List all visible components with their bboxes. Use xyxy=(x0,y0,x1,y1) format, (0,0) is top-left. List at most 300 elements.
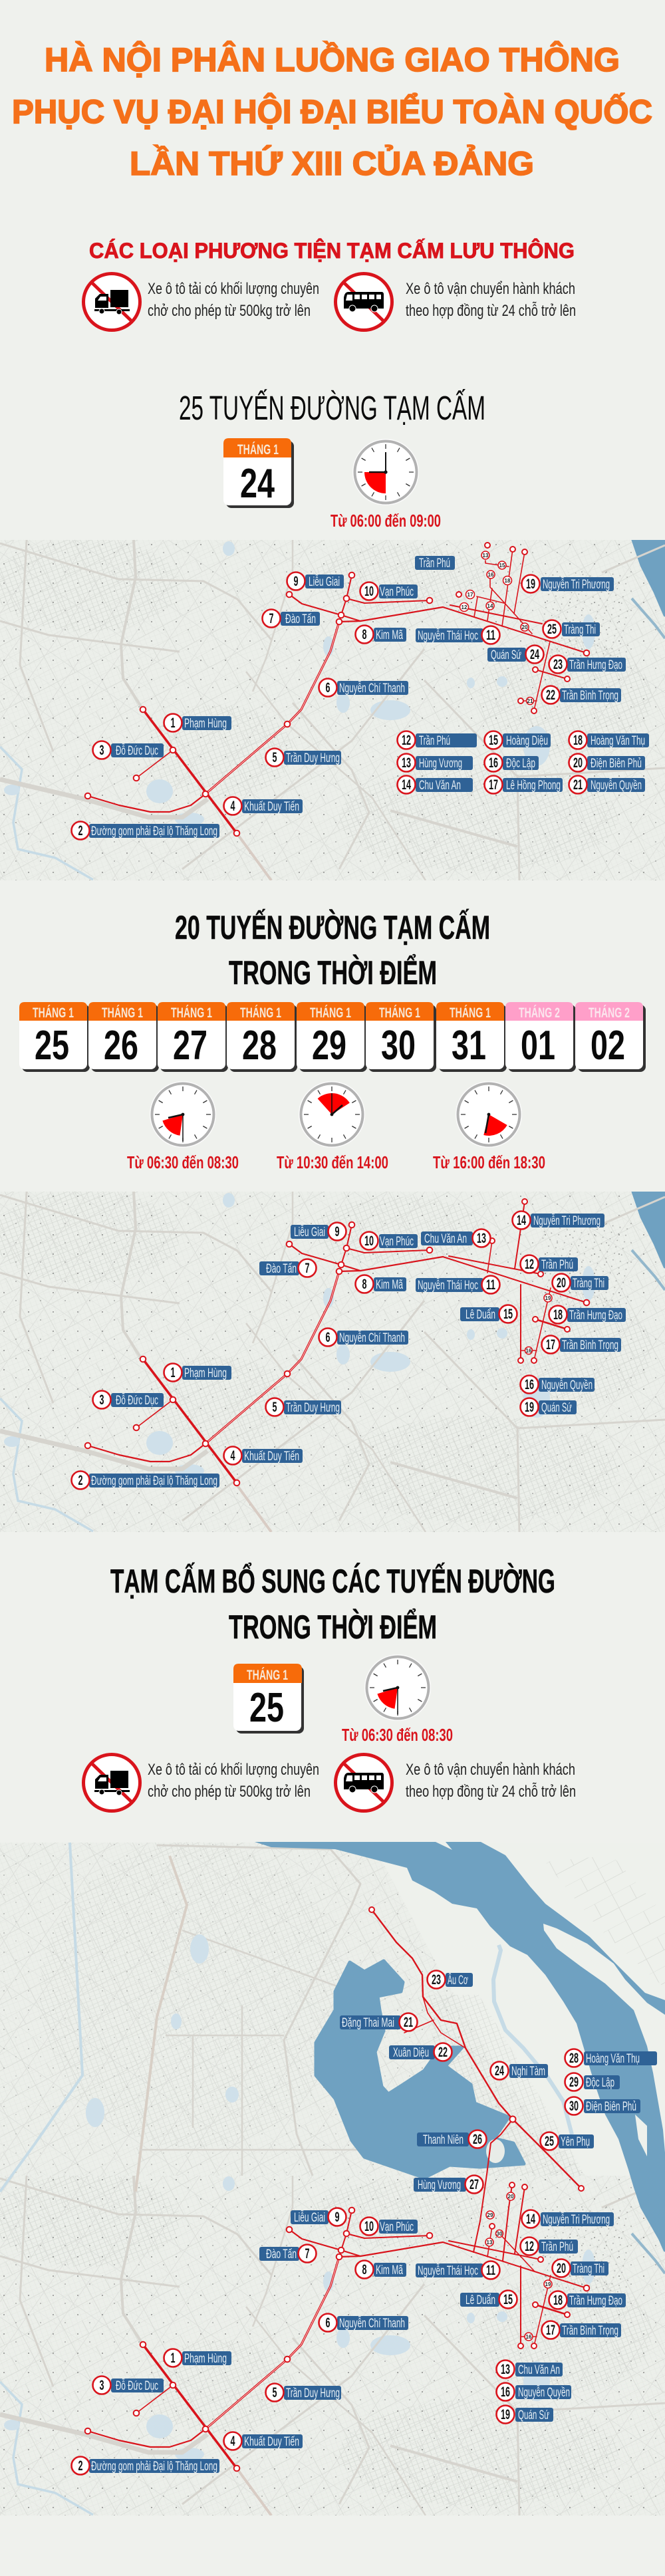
label 3 xyxy=(93,741,164,759)
label 5: 5 xyxy=(273,1400,277,1415)
legend 13: 13 xyxy=(402,755,411,771)
label 14 xyxy=(512,1212,604,1229)
label 6: 6 xyxy=(326,680,330,696)
label 19: 19 xyxy=(501,2407,510,2422)
label 4 xyxy=(223,797,303,815)
label 25: Tràng Thi xyxy=(564,623,596,637)
title: PHỤC VỤ ĐẠI HỘI ĐẠI BIỂU TOÀN QUỐC xyxy=(12,92,652,130)
label 20: 20 xyxy=(557,1275,566,1291)
label 8: 8 xyxy=(362,627,367,642)
calendar: 24 January: THÁNG 1 xyxy=(237,442,279,457)
routes: 19 xyxy=(545,2281,551,2287)
label 9 xyxy=(291,1222,346,1241)
label 3 xyxy=(93,1391,164,1408)
calendar 31: 31 xyxy=(452,1023,486,1069)
calendar 02: THÁNG 2 xyxy=(589,1005,630,1021)
text: truck rule: Xe ô tô tải có khối lượng chuyên xyxy=(148,280,319,298)
label 1: Phạm Hùng xyxy=(184,2352,227,2366)
legend 20: 20 xyxy=(573,755,583,771)
label 27: 27 xyxy=(469,2177,479,2192)
label 21: 21 xyxy=(404,2015,413,2030)
label 25 xyxy=(540,2132,594,2150)
legend 16: 16 xyxy=(489,755,498,771)
label 2: 2 xyxy=(78,1473,82,1488)
map 1: 25 routes xyxy=(0,539,665,880)
legend 14: 14 xyxy=(402,777,411,793)
label 7: Đào Tấn xyxy=(285,612,316,626)
calendar row: 25 January to 2 February xyxy=(19,1002,646,1072)
label 16: Nguyễn Quyền xyxy=(541,1378,593,1392)
text: bus rule: theo hợp đồng từ 24 chỗ trở lên xyxy=(406,302,576,320)
label 11: Nguyễn Thái Học xyxy=(418,628,478,643)
time label: Từ 06:30 đến 08:30 xyxy=(342,1725,453,1745)
label 11: Nguyễn Thái Học xyxy=(418,1278,478,1293)
label 4 xyxy=(223,2432,303,2450)
label 12 xyxy=(520,2237,578,2255)
legend 18 xyxy=(569,731,649,749)
label 14: Nguyễn Tri Phương xyxy=(543,2212,610,2227)
label 1: Phạm Hùng xyxy=(184,1366,227,1380)
label 26: 26 xyxy=(473,2132,482,2147)
clock: 10:30 to 14:00 xyxy=(299,1081,365,1148)
text: bus rule xyxy=(406,1761,576,1801)
label 7 xyxy=(262,609,320,628)
label 1: 1 xyxy=(170,715,176,731)
label 22: Xuân Diệu xyxy=(393,2046,429,2060)
label 8 xyxy=(355,1275,406,1293)
label 12: 12 xyxy=(525,1257,534,1272)
calendar 29 xyxy=(297,1002,367,1072)
label 5 xyxy=(266,2383,341,2402)
calendar 31 xyxy=(436,1002,507,1072)
label 10: Vạn Phúc xyxy=(380,2220,414,2234)
label 23: 23 xyxy=(432,1972,441,1988)
label 10 xyxy=(360,2217,418,2236)
label 6: 6 xyxy=(326,1330,330,1345)
label 30: 30 xyxy=(569,2099,579,2114)
label 26 xyxy=(417,2130,487,2148)
label 19: Nguyễn Tri Phương xyxy=(543,577,610,592)
label 18: 18 xyxy=(553,1307,563,1323)
legend 17 xyxy=(484,775,563,794)
label 10 xyxy=(360,582,418,600)
clock: 06:30 to 08:30 xyxy=(150,1081,216,1148)
routes: 12 xyxy=(462,604,467,610)
label 30: Điện Biên Phủ xyxy=(586,2100,636,2114)
label 11: 11 xyxy=(486,2263,495,2278)
calendar 01 xyxy=(505,1002,576,1072)
time label: 16:00: Từ 16:00 đến 18:30 xyxy=(433,1152,545,1172)
label 13: Chu Văn An xyxy=(518,2363,560,2377)
text: bus rule xyxy=(406,280,576,320)
text: bus rule: theo hợp đồng từ 24 chỗ trở lên xyxy=(406,1783,576,1801)
routes: 20 xyxy=(522,624,528,630)
heading: 25 routes: 25 TUYẾN ĐƯỜNG TẠM CẤM xyxy=(179,388,485,427)
calendar 29: 29 xyxy=(312,1023,346,1069)
routes xyxy=(85,1199,589,1485)
heading: 20 routes xyxy=(175,909,490,991)
label 10: Vạn Phúc xyxy=(380,585,414,599)
label 17 xyxy=(541,2321,621,2339)
text: bus rule: Xe ô tô vận chuyển hành khách xyxy=(406,1761,575,1779)
label 18 xyxy=(549,1306,626,1323)
label 22 xyxy=(541,686,621,704)
label 17: Trần Bình Trọng xyxy=(562,1339,618,1352)
label 3 xyxy=(93,2377,164,2394)
map background xyxy=(0,539,665,880)
label 23: Âu Cơ xyxy=(448,1973,468,1988)
text: truck rule xyxy=(148,280,319,320)
icon: no buses xyxy=(335,274,392,330)
label 26: Thanh Niên xyxy=(423,2133,464,2147)
legend 14: Chu Văn An xyxy=(419,779,461,793)
text: truck rule: chở cho phép từ 500kg trở lên xyxy=(148,1783,311,1801)
label 19: Quán Sứ xyxy=(541,1401,572,1415)
label 9: Liễu Giai xyxy=(309,575,340,589)
label 7 xyxy=(259,1259,317,1277)
label 4: Khuất Duy Tiến xyxy=(244,800,299,814)
label 3: 3 xyxy=(100,1392,104,1408)
calendar 28: THÁNG 1 xyxy=(240,1005,281,1021)
label 3: Đỗ Đức Dục xyxy=(116,743,158,758)
calendar 30: 30 xyxy=(381,1023,416,1069)
title: LẦN THỨ XIII CỦA ĐẢNG xyxy=(130,144,534,182)
label 12: Trần Phú xyxy=(541,1258,573,1272)
label 13 xyxy=(496,2361,563,2378)
label 23: Trần Hưng Đạo xyxy=(569,658,622,672)
calendar 25: THÁNG 1 xyxy=(33,1005,74,1021)
clock: 06:30 to 08:30 xyxy=(364,1654,431,1721)
label 6: Nguyễn Chí Thanh xyxy=(339,681,405,696)
label 9: 9 xyxy=(294,574,298,589)
label 19: 19 xyxy=(525,1400,534,1415)
label 5 xyxy=(266,749,341,766)
calendar 26 xyxy=(88,1002,159,1072)
legend 21 xyxy=(569,775,645,794)
label 7 xyxy=(259,2245,317,2262)
label 13: 13 xyxy=(477,1231,486,1246)
label 9: Liễu Giai xyxy=(294,2210,325,2225)
label 5: 5 xyxy=(273,2385,277,2400)
label 6: 6 xyxy=(326,2315,330,2331)
label 12 xyxy=(520,1255,578,1273)
label 29: Độc Lập xyxy=(586,2076,614,2090)
label 7: 7 xyxy=(269,611,274,626)
title: HÀ NỘI PHÂN LUỒNG GIAO THÔNG xyxy=(45,41,620,78)
label 7: 7 xyxy=(305,1261,310,1276)
label 7: Đào Tấn xyxy=(266,2248,297,2261)
label 8 xyxy=(355,625,406,644)
time label: Từ 06:00 đến 09:00 xyxy=(331,511,441,531)
legend 16 xyxy=(484,754,539,771)
legend 13 xyxy=(398,754,473,771)
map 3: additional routes xyxy=(0,1842,665,2515)
label 11: Nguyễn Thái Học xyxy=(418,2263,478,2278)
calendar 01: 01 xyxy=(521,1023,555,1069)
label 3: 3 xyxy=(100,2378,104,2393)
label 2 xyxy=(72,2456,219,2475)
label 10: 10 xyxy=(364,2219,374,2234)
routes xyxy=(85,1907,589,2471)
label 9 xyxy=(287,572,344,590)
label 24 xyxy=(491,2061,548,2080)
heading: additional routes: TRONG THỜI ĐIỂM xyxy=(229,1609,437,1646)
legend 21: 21 xyxy=(573,777,583,793)
label 20 xyxy=(552,2259,608,2277)
time label: 10:30: Từ 10:30 đến 14:00 xyxy=(277,1152,388,1172)
heading: banned vehicle types: CÁC LOẠI PHƯƠNG TIỆN TẠM CẤM LƯU THÔNG xyxy=(89,239,575,263)
label 3: 3 xyxy=(100,743,104,758)
label 24: 24 xyxy=(530,647,539,662)
calendar: 24 January xyxy=(223,438,294,508)
icon: no buses xyxy=(335,1754,392,1811)
label 25: 25 xyxy=(545,2134,554,2149)
legend 15 xyxy=(484,731,551,749)
label 1 xyxy=(164,714,231,731)
heading: 20 routes: 20 TUYẾN ĐƯỜNG TẠM CẤM xyxy=(175,909,490,946)
label 2: Đường gom phải Đại lộ Thăng Long xyxy=(91,825,217,838)
calendar: 25 January: THÁNG 1 xyxy=(247,1668,288,1683)
label 7: Đào Tấn xyxy=(266,1262,297,1276)
label 30 xyxy=(565,2097,640,2115)
routes: 13 xyxy=(487,2240,493,2246)
label 2: 2 xyxy=(78,823,82,838)
map 2: 20 routes xyxy=(0,1190,665,1532)
calendar 26: 26 xyxy=(104,1023,138,1069)
time label: 06:30: Từ 06:30 đến 08:30 xyxy=(127,1152,239,1172)
label 15 xyxy=(460,2290,517,2309)
label 11 xyxy=(416,1275,500,1294)
label 25 xyxy=(543,620,600,638)
label 5 xyxy=(266,1398,341,1416)
label 17: 17 xyxy=(546,1337,555,1352)
legend 18: 18 xyxy=(573,733,583,748)
label 4: 4 xyxy=(230,1448,235,1464)
label 13: 13 xyxy=(501,2362,510,2377)
label 19 xyxy=(521,575,614,593)
label 10 xyxy=(360,1231,418,1250)
calendar 01: THÁNG 2 xyxy=(519,1005,560,1021)
label 16 xyxy=(496,2383,571,2400)
label 6: Nguyễn Chí Thanh xyxy=(339,2316,405,2331)
label 19: Quán Sứ xyxy=(518,2408,549,2422)
calendar 27: 27 xyxy=(173,1023,207,1069)
clock: 06:00 to 09:00 xyxy=(352,439,419,505)
routes: 14 xyxy=(487,603,493,609)
label 29: 29 xyxy=(569,2075,579,2090)
legend 15: Hoàng Diệu xyxy=(506,734,548,748)
label 18: Trần Hưng Đạo xyxy=(569,1309,622,1323)
legend 12: 12 xyxy=(402,733,411,748)
routes: 19 xyxy=(545,1295,551,1301)
label 1: 1 xyxy=(170,1365,176,1380)
heading: 20 routes: TRONG THỜI ĐIỂM xyxy=(229,954,437,991)
label 2 xyxy=(72,822,219,839)
legend 17: Lê Hồng Phong xyxy=(506,779,561,793)
text: bus rule: Xe ô tô vận chuyển hành khách xyxy=(406,280,575,298)
label Trần Phú: Trần Phú xyxy=(419,557,450,571)
label 16: 16 xyxy=(501,2384,510,2400)
label 1: 1 xyxy=(170,2351,176,2366)
routes: 20 xyxy=(508,2194,514,2200)
label 14 xyxy=(521,2210,614,2228)
label 8: 8 xyxy=(362,2262,367,2277)
label 22: 22 xyxy=(438,2045,448,2060)
legend 17: 17 xyxy=(489,777,498,793)
label 16: 16 xyxy=(525,1377,534,1392)
title xyxy=(12,41,652,182)
icon: no trucks xyxy=(84,1754,140,1811)
label 11 xyxy=(416,2261,500,2279)
label 8: Kim Mã xyxy=(376,2263,403,2277)
label 2 xyxy=(72,1471,219,1489)
calendar: 24 January: 24 xyxy=(240,461,275,507)
label 8 xyxy=(355,2261,406,2278)
label 1 xyxy=(164,2349,231,2367)
label 1 xyxy=(164,1363,231,1382)
label 9: 9 xyxy=(335,2210,339,2225)
calendar 30 xyxy=(366,1002,436,1072)
label 4: Khuất Duy Tiến xyxy=(244,1450,299,1464)
routes: 30 xyxy=(497,2231,503,2237)
label 17 xyxy=(541,1335,621,1354)
label 19: 19 xyxy=(526,577,535,592)
routes: 16 xyxy=(488,572,494,578)
label 19 xyxy=(520,1398,577,1416)
calendar 25: 25 xyxy=(35,1023,69,1069)
label 11: 11 xyxy=(486,1277,495,1293)
label 9 xyxy=(291,2208,346,2226)
routes: 15 xyxy=(499,563,505,569)
label 10: 10 xyxy=(364,1233,374,1249)
label 18: 18 xyxy=(553,2293,563,2308)
label 5: Trần Duy Hưng xyxy=(286,751,340,765)
label 21: Đặng Thai Mai xyxy=(342,2016,394,2030)
label 14: 14 xyxy=(517,1213,526,1228)
routes: 21 xyxy=(527,698,533,704)
legend 16: Độc Lập xyxy=(506,757,535,771)
label 14: Nguyễn Tri Phương xyxy=(533,1214,600,1228)
label 10: Vạn Phúc xyxy=(380,1235,414,1249)
routes: 13 xyxy=(483,553,489,559)
label 2: 2 xyxy=(78,2458,82,2474)
label 4: 4 xyxy=(230,2434,235,2449)
label 20 xyxy=(552,1274,608,1291)
calendar 25 xyxy=(19,1002,90,1072)
label 27 xyxy=(414,2176,483,2193)
label 7: 7 xyxy=(305,2246,310,2261)
routes: 29 xyxy=(487,2212,493,2218)
calendar 02 xyxy=(575,1002,646,1072)
label 17: 17 xyxy=(546,2323,555,2338)
label 15: 15 xyxy=(503,2292,513,2307)
routes xyxy=(85,543,589,836)
label 13: Chu Văn An xyxy=(424,1232,467,1246)
label 4: Khuất Duy Tiến xyxy=(244,2435,299,2449)
label 5: Trần Duy Hưng xyxy=(286,1401,340,1415)
label 29 xyxy=(565,2073,620,2091)
label 23 xyxy=(549,656,626,673)
legend 12: Trần Phú xyxy=(419,734,450,748)
calendar 31: THÁNG 1 xyxy=(450,1005,491,1021)
text: truck rule: Xe ô tô tải có khối lượng chuyên xyxy=(148,1761,319,1779)
heading: additional routes xyxy=(110,1562,555,1646)
label 8: Kim Mã xyxy=(376,628,403,642)
routes: 18 xyxy=(505,578,511,584)
calendar: 25 January: 25 xyxy=(249,1685,284,1731)
calendar 27: THÁNG 1 xyxy=(171,1005,212,1021)
label 28 xyxy=(565,2049,657,2067)
label 15: 15 xyxy=(503,1307,513,1322)
lower map background xyxy=(0,2174,665,2515)
clock: 16:00 to 18:30 xyxy=(456,1081,522,1148)
label 16 xyxy=(520,1375,595,1394)
routes: 17 xyxy=(467,592,473,598)
upper map background with West Lake and Red River xyxy=(0,1842,665,2251)
label 22: Trần Bình Trọng xyxy=(562,689,618,703)
label 24: 24 xyxy=(495,2063,504,2079)
label 10: 10 xyxy=(364,584,374,599)
calendar 27 xyxy=(158,1002,228,1072)
calendar 28: 28 xyxy=(242,1023,277,1069)
label 25: Yên Phụ xyxy=(561,2135,590,2149)
label 19 xyxy=(496,2406,553,2423)
label 18: Trần Hưng Đạo xyxy=(569,2294,622,2308)
label 1: Phạm Hùng xyxy=(184,717,227,731)
legend 15: 15 xyxy=(489,733,498,748)
label 27: Hùng Vương xyxy=(418,2178,461,2192)
calendar 26: THÁNG 1 xyxy=(102,1005,143,1021)
text: truck rule: chở cho phép từ 500kg trở lên xyxy=(148,302,311,320)
label 6 xyxy=(319,1329,408,1346)
calendar 29: THÁNG 1 xyxy=(310,1005,351,1021)
legend 20 xyxy=(569,754,645,771)
label 20: Tràng Thi xyxy=(573,1277,604,1291)
legend 13: Hùng Vương xyxy=(419,757,462,771)
calendar 28 xyxy=(227,1002,297,1072)
label 6 xyxy=(319,678,408,697)
label 16: Nguyễn Quyền xyxy=(518,2385,570,2400)
label Trần Phú xyxy=(415,556,455,571)
label 11 xyxy=(416,626,500,644)
legend 12 xyxy=(398,731,477,749)
label 3: Đỗ Đức Dục xyxy=(116,2379,158,2393)
label 4 xyxy=(223,1447,303,1464)
label 15 xyxy=(460,1305,517,1323)
label 17: Trần Bình Trọng xyxy=(562,2324,618,2338)
label 25: 25 xyxy=(547,622,557,637)
label 24: Quán Sứ xyxy=(491,648,521,662)
label 24: Nghi Tàm xyxy=(511,2065,545,2079)
label 5: 5 xyxy=(273,750,277,765)
calendar: 25 January xyxy=(233,1664,304,1734)
label 20: 20 xyxy=(557,2261,566,2276)
icon: no trucks xyxy=(84,274,140,330)
label 5: Trần Duy Hưng xyxy=(286,2386,340,2400)
text: truck rule xyxy=(148,1761,319,1801)
routes: 16 xyxy=(526,2334,532,2340)
label 8: Kim Mã xyxy=(376,1278,403,1292)
label 23 xyxy=(427,1971,473,1988)
label 2: Đường gom phải Đại lộ Thăng Long xyxy=(91,2460,217,2474)
calendar 02: 02 xyxy=(591,1023,625,1069)
routes: 16 xyxy=(526,1348,532,1354)
calendar 30: THÁNG 1 xyxy=(379,1005,420,1021)
label 15: Lê Duẩn xyxy=(466,2293,495,2307)
label 6 xyxy=(319,2314,408,2331)
label 18 xyxy=(549,2291,626,2309)
label 12: 12 xyxy=(525,2239,534,2254)
